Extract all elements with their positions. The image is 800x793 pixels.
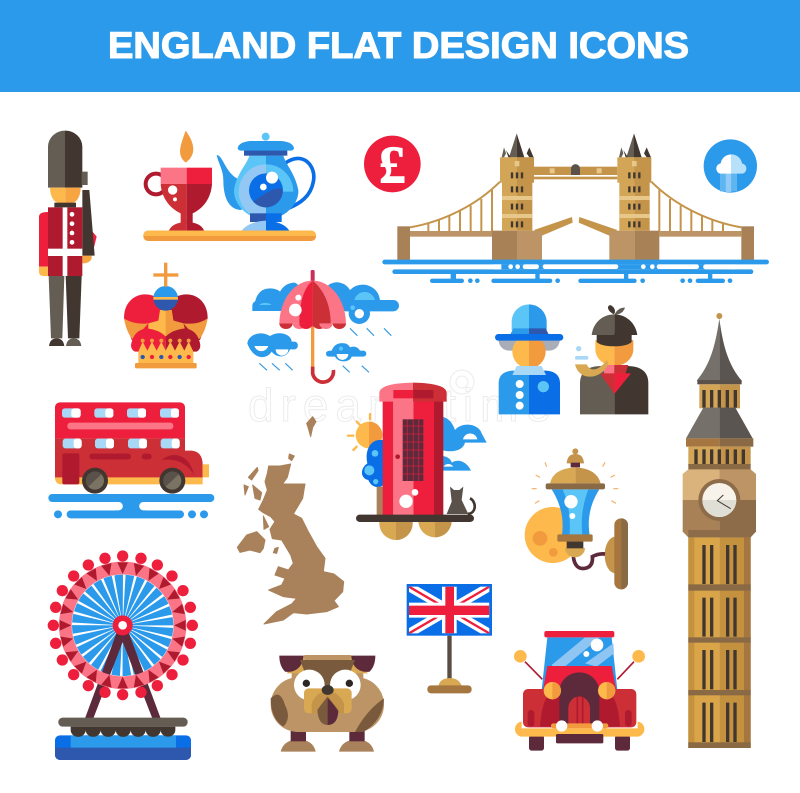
icon: big ben (683, 313, 756, 748)
icon: tea cup and teapot on shelf (143, 131, 316, 241)
icon: vintage taxi car (514, 631, 645, 751)
icon: tower bridge (382, 133, 769, 283)
icon: bulldog (271, 655, 384, 752)
cat (447, 487, 475, 514)
icon: pound coin: £ (379, 134, 406, 194)
icon: cloud badge (704, 139, 757, 193)
icon: double decker bus (48, 402, 214, 518)
header banner (0, 0, 800, 92)
watermark: dreamstime (248, 379, 551, 431)
icon: detective with pipe (575, 305, 648, 414)
icon: policeman (495, 304, 563, 414)
icon: london eye ferris wheel (48, 550, 198, 760)
icon: pound coin (364, 134, 421, 194)
river under bridge (382, 260, 769, 283)
road under bus (48, 494, 214, 518)
icon: royal guard soldier (39, 131, 97, 346)
icon: union jack flag (407, 584, 492, 693)
icon: uk map (237, 417, 344, 624)
icon: royal crown (124, 263, 208, 368)
icon: street lamp with moon (525, 448, 628, 589)
icon: umbrella with rain clouds (247, 270, 399, 382)
title: ENGLAND FLAT DESIGN ICONS (108, 25, 689, 66)
icon: red telephone box (348, 383, 487, 540)
